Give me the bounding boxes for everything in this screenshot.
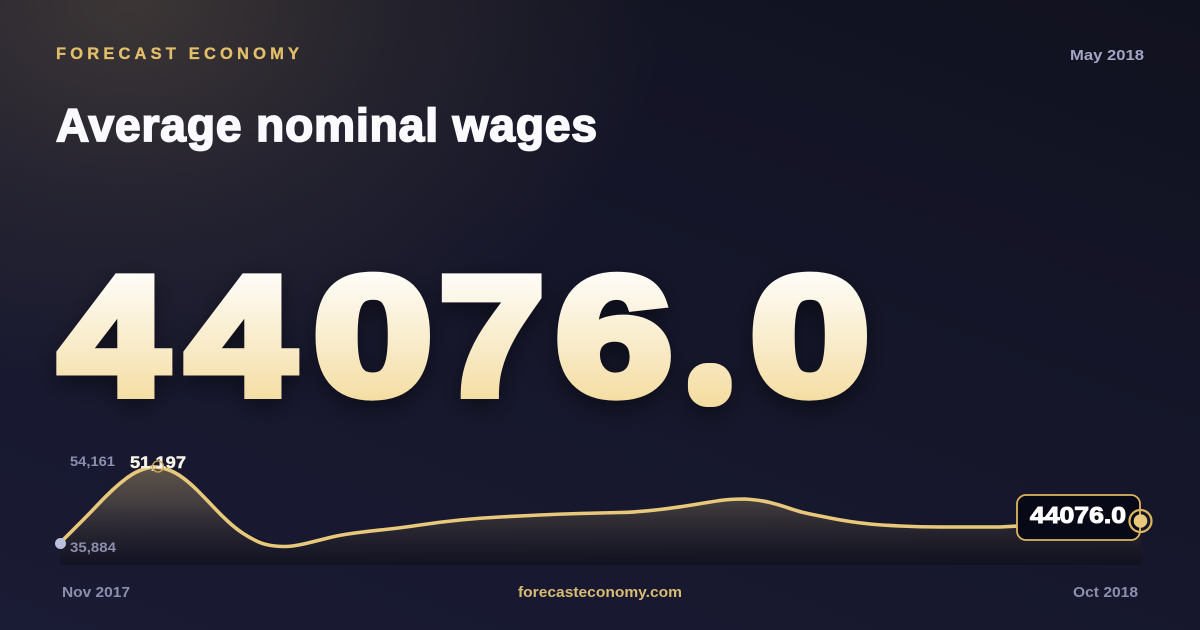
brand label: FORECAST ECONOMY: [56, 45, 299, 63]
latest value callout: 44076.0: [1030, 502, 1126, 528]
big value: 0: [313, 242, 432, 430]
big value: [59, 242, 869, 430]
end date: Oct 2018: [1073, 585, 1138, 601]
latest value callout: [1017, 495, 1140, 540]
big value: 0: [750, 242, 869, 430]
big value: 6: [556, 243, 672, 430]
date label: May 2018: [1070, 47, 1144, 64]
sparkline chart: [55, 453, 1152, 565]
title: Average nominal wages: [56, 99, 597, 151]
max label: 54,161: [70, 454, 116, 469]
peak marker: [152, 461, 164, 472]
min label: 35,884: [70, 540, 117, 555]
trend line: [60, 467, 1018, 546]
big value: .: [704, 353, 715, 397]
peak value: 51,197: [130, 453, 186, 472]
big value: 7: [439, 242, 544, 430]
baseline shade: [60, 467, 1141, 565]
area under curve: [60, 467, 1141, 565]
latest point marker: [1130, 510, 1152, 532]
start point: [55, 538, 66, 549]
start date: Nov 2017: [62, 585, 130, 601]
site url: forecasteconomy.com: [518, 585, 682, 601]
big value: 44: [59, 242, 295, 430]
